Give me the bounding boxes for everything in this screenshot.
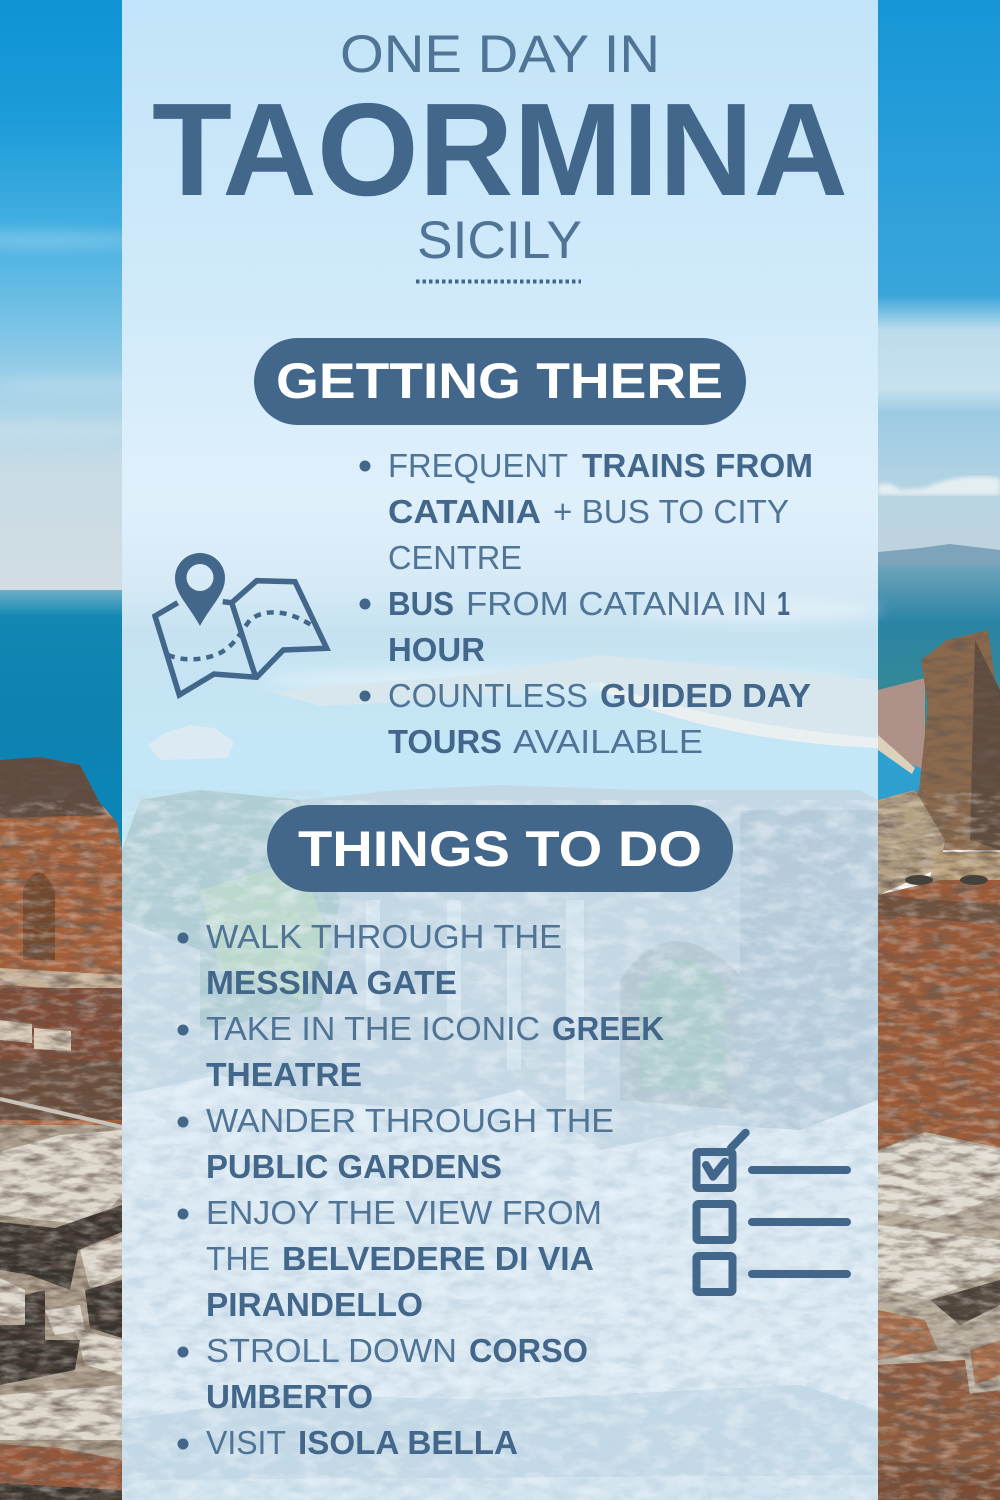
things to do list: ISOLA BELLA xyxy=(298,1424,518,1461)
getting there list: HOUR xyxy=(388,631,485,668)
getting there list: TOURS xyxy=(388,723,502,760)
icon: map with location pin xyxy=(155,553,327,695)
things to do list: CORSO xyxy=(469,1332,588,1369)
things to do list: PIRANDELLO xyxy=(206,1286,423,1323)
things to do list: ENJOY THE VIEW FROM xyxy=(206,1194,602,1231)
things to do list: GREEK xyxy=(552,1010,664,1047)
title: ONE DAY IN xyxy=(340,25,660,84)
things to do list: WANDER THROUGH THE xyxy=(206,1102,614,1139)
getting there list: COUNTLESS xyxy=(388,677,588,714)
things to do list: STROLL DOWN xyxy=(206,1332,457,1369)
translucent centre panel with faded photo xyxy=(122,0,880,1500)
getting there list: TRAINS FROM xyxy=(582,447,813,484)
heading: getting there: GETTING THERE xyxy=(276,353,723,409)
title: SICILY xyxy=(417,211,582,270)
title xyxy=(152,25,848,282)
getting there list xyxy=(360,447,813,760)
background photo: right side, sky, coast and ruin xyxy=(878,0,1000,1500)
heading: things to do: THINGS TO DO xyxy=(298,821,702,877)
getting there list: FREQUENT xyxy=(388,447,568,484)
background photo: left side, sky, sea and ruin xyxy=(0,0,170,1500)
things to do list xyxy=(178,918,664,1461)
things to do list: VISIT xyxy=(206,1424,286,1461)
getting there list: FROM CATANIA IN xyxy=(466,585,767,622)
things to do list: UMBERTO xyxy=(206,1378,373,1415)
things to do list: THE xyxy=(206,1240,270,1277)
getting there list: AVAILABLE xyxy=(513,723,703,760)
icon: checklist xyxy=(696,1133,847,1292)
things to do list: THEATRE xyxy=(206,1056,362,1093)
things to do list: PUBLIC GARDENS xyxy=(206,1148,502,1185)
getting there list: 1 xyxy=(777,585,790,622)
things to do list: BELVEDERE DI VIA xyxy=(282,1240,594,1277)
getting there list: CENTRE xyxy=(388,539,522,576)
heading: things to do xyxy=(267,805,733,892)
getting there list: BUS xyxy=(388,585,454,622)
getting there list: GUIDED DAY xyxy=(600,677,811,714)
title: TAORMINA xyxy=(152,76,848,223)
things to do list: MESSINA GATE xyxy=(206,964,457,1001)
things to do list: TAKE IN THE ICONIC xyxy=(206,1010,540,1047)
getting there list: + BUS TO CITY xyxy=(553,493,789,530)
things to do list: WALK THROUGH THE xyxy=(206,918,562,955)
getting there list: CATANIA xyxy=(388,493,541,530)
heading: getting there xyxy=(254,338,746,425)
